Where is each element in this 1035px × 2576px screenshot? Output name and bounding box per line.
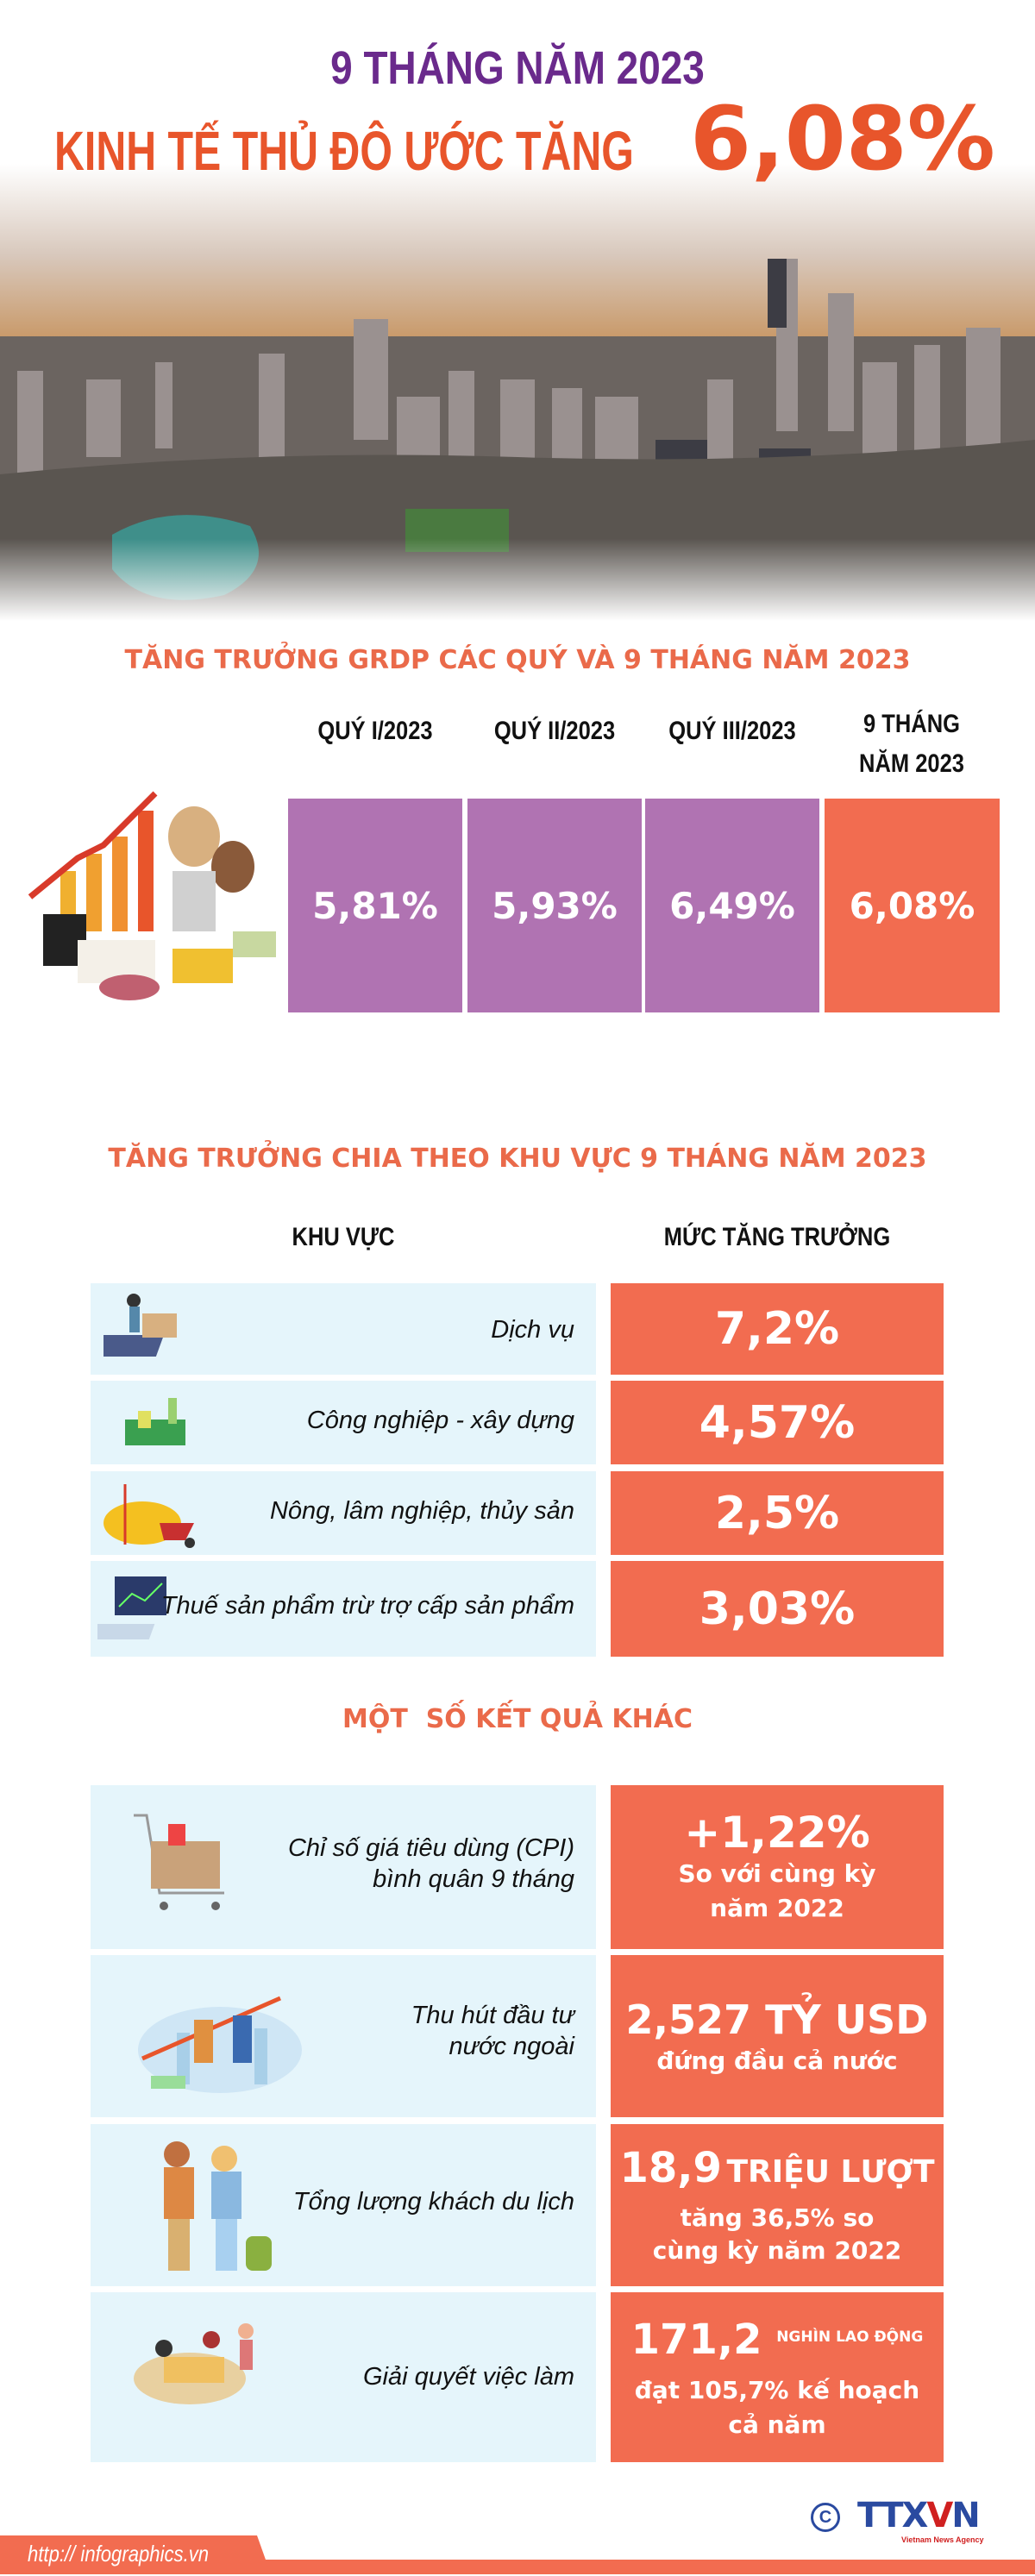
footer bar: http:// infographics.vn — [28, 2541, 209, 2567]
heading: GRDP: TĂNG TRƯỞNG GRDP CÁC QUÝ VÀ 9 THÁNG NĂM 2023 — [125, 645, 910, 675]
sector rows: 4,57% — [699, 1397, 855, 1449]
quarter value boxes: 6,08% — [850, 885, 975, 926]
column headers GRDP — [317, 709, 964, 778]
quarter value boxes: 6,49% — [669, 885, 795, 926]
icon: economy goods illustration — [28, 792, 276, 1000]
row: FDI — [91, 1955, 596, 2117]
sector rows — [91, 1283, 944, 1657]
other results rows: đạt 105,7% kế hoạch — [635, 2375, 919, 2404]
sector rows: 2,5% — [715, 1487, 839, 1539]
row: Công nghiệp: Công nghiệp - xây dựng — [307, 1407, 574, 1434]
column headers GRDP: NĂM 2023 — [859, 749, 964, 778]
column headers GRDP: QUÝ III/2023 — [668, 717, 796, 745]
row: Dịch vụ — [91, 1283, 596, 1375]
quarter value boxes: 5,81% — [312, 885, 438, 926]
row: Dịch vụ: Dịch vụ — [491, 1316, 574, 1344]
row: Công nghiệp — [91, 1381, 596, 1464]
title line 2: KINH TẾ THỦ ĐÔ ƯỚC TĂNG — [54, 120, 634, 182]
logo: TTXVN: TTXVN — [857, 2496, 979, 2535]
row: CPI — [91, 1785, 596, 1949]
column headers GRDP: 9 THÁNG — [863, 710, 960, 738]
other results rows: cả năm — [728, 2410, 826, 2439]
title line 2: 6,08% — [690, 88, 995, 191]
other results rows — [91, 1785, 944, 2462]
title line 2 — [54, 88, 995, 191]
heading: sectors: TĂNG TRƯỞNG CHIA THEO KHU VỰC 9 THÁNG NĂM 2023 — [108, 1144, 927, 1174]
other results rows: So với cùng kỳ — [678, 1859, 876, 1888]
row: CPI: bình quân 9 tháng — [373, 1865, 574, 1893]
row: FDI: nước ngoài — [448, 2033, 574, 2060]
photo: city skyline — [0, 175, 1035, 617]
quarter value boxes — [288, 799, 1000, 1012]
other results rows: đứng đầu cả nước — [656, 2046, 898, 2075]
quarter value boxes: 5,93% — [492, 885, 618, 926]
sector rows: 7,2% — [715, 1303, 839, 1355]
other results rows: 171,2 NGHÌN LAO ĐỘNG — [631, 2315, 923, 2363]
row: Thuế: Thuế sản phẩm trừ trợ cấp sản phẩm — [161, 1592, 574, 1620]
column headers sectors: KHU VỰC — [292, 1223, 394, 1251]
other results rows: +1,22% — [684, 1808, 870, 1858]
row: tourism: Tổng lượng khách du lịch — [293, 2188, 574, 2216]
other results rows: cùng kỳ năm 2022 — [653, 2235, 901, 2265]
row: FDI: Thu hút đầu tư — [411, 2002, 574, 2029]
footer bar — [0, 2535, 1035, 2574]
title line 1: 9 THÁNG NĂM 2023 — [330, 42, 705, 94]
row: CPI: Chỉ số giá tiêu dùng (CPI) — [288, 1834, 574, 1862]
column headers GRDP: QUÝ II/2023 — [494, 717, 615, 745]
other results rows: 18,9 TRIỆU LƯỢT — [619, 2144, 935, 2192]
other results rows: tăng 36,5% so — [681, 2203, 874, 2232]
column headers sectors: MỨC TĂNG TRƯỞNG — [664, 1223, 890, 1251]
other results rows: năm 2022 — [710, 1894, 844, 1922]
sector rows: 3,03% — [699, 1583, 855, 1635]
logo: TTXVN: Vietnam News Agency — [901, 2535, 984, 2544]
row: jobs: Giải quyết việc làm — [363, 2363, 574, 2391]
row: Nông lâm: Nông, lâm nghiệp, thủy sản — [270, 1497, 574, 1525]
other results rows: 2,527 TỶ USD — [626, 1996, 928, 2043]
row: jobs — [91, 2292, 596, 2462]
row: Nông lâm — [91, 1471, 596, 1555]
heading: other results: MỘT SỐ KẾT QUẢ KHÁC — [342, 1704, 693, 1734]
row: tourism — [91, 2124, 596, 2286]
column headers sectors — [292, 1223, 890, 1251]
logo: TTXVN: C — [819, 2508, 831, 2527]
column headers GRDP: QUÝ I/2023 — [317, 717, 433, 745]
row: Thuế — [91, 1561, 596, 1657]
logo: TTXVN — [811, 2496, 984, 2544]
